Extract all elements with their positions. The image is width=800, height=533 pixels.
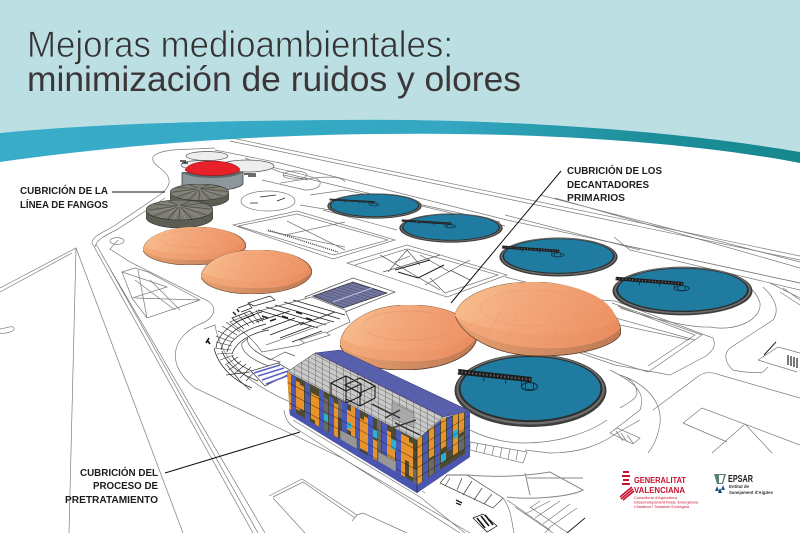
leader line: pretreatment xyxy=(165,432,300,473)
label: primary settlers: DECANTADORES xyxy=(567,180,649,191)
label: primary settlers: PRIMARIOS xyxy=(567,193,625,204)
label: pretreatment process: CUBRICIÓN DEL xyxy=(80,466,158,479)
logo: Generalitat Valenciana: VALENCIANA xyxy=(634,485,685,495)
dark covered tanks xyxy=(146,184,229,228)
logo: Generalitat Valenciana: Climàtica i Transició Ecològica xyxy=(634,504,690,509)
logo: Generalitat Valenciana: GENERALITAT xyxy=(634,475,687,485)
building end facade xyxy=(417,411,470,493)
EPSAR mark xyxy=(714,474,726,493)
red covered tank xyxy=(182,161,243,190)
label: sludge line: LÍNEA DE FANGOS xyxy=(20,198,108,211)
plant plan line drawing xyxy=(0,137,800,533)
logo: Generalitat Valenciana: Conselleria d'Agricultura, xyxy=(634,495,678,500)
label: pretreatment process: PROCESO DE xyxy=(93,481,158,492)
title xyxy=(27,24,521,99)
title: minimización de ruidos y olores xyxy=(27,60,521,99)
front shutter doors xyxy=(340,430,396,479)
pretreatment complex xyxy=(206,278,395,390)
teal curved band xyxy=(0,120,800,163)
label: pretreatment process xyxy=(65,466,158,506)
header background xyxy=(0,0,800,163)
crest xyxy=(620,472,634,500)
title: Mejoras medioambientales: xyxy=(27,24,453,65)
logo: EPSAR xyxy=(714,474,773,496)
pretreatment building xyxy=(287,350,470,508)
logo: EPSAR: Entitat de xyxy=(729,484,749,490)
label: sludge line xyxy=(20,184,108,211)
logo: Generalitat Valenciana: Desenvolupament Rural, Emergència xyxy=(634,500,699,504)
leader line: settlers xyxy=(451,171,561,303)
label: primary settlers: CUBRICIÓN DE LOS xyxy=(567,164,662,177)
label: pretreatment process: PRETRATAMIENTO xyxy=(65,495,158,506)
blue settling tanks xyxy=(327,193,753,427)
logo: EPSAR: Sanejament d'Aigües xyxy=(729,490,773,496)
building front facade xyxy=(287,372,417,493)
leader line: sludge xyxy=(112,191,165,193)
orange dome covers xyxy=(143,227,312,294)
label: sludge line: CUBRICIÓN DE LA xyxy=(20,184,108,197)
label: primary settlers xyxy=(567,164,662,204)
logo: Generalitat Valenciana xyxy=(620,472,699,509)
large dome covers xyxy=(340,282,621,370)
logo: EPSAR: EPSAR xyxy=(728,474,754,485)
sludge line surrounding tanks xyxy=(180,152,274,176)
